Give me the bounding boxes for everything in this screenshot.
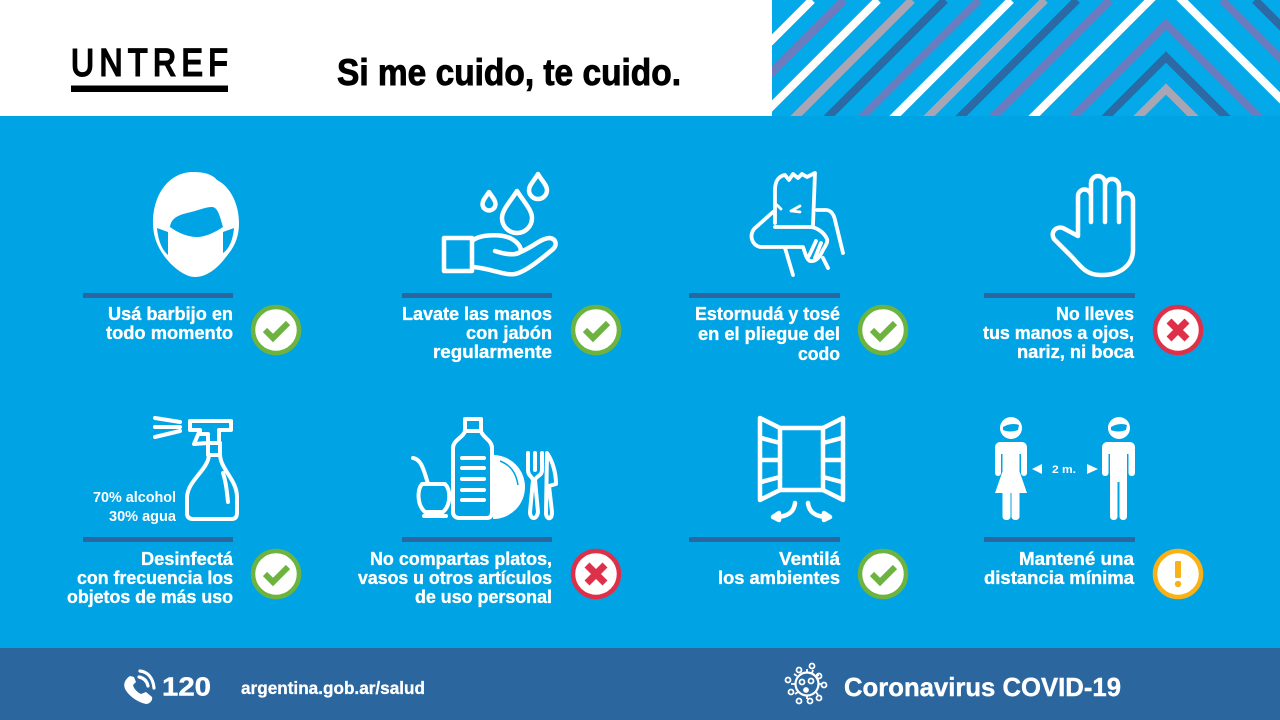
label: alcohol mix [93,489,177,525]
text: ventilar [718,549,841,588]
panel: no tocarse la cara [983,176,1201,362]
icon: man with mask [1102,417,1135,520]
icon: hand with water drops [444,174,556,274]
text: no compartir [358,549,552,607]
icon: warning badge [1155,551,1201,597]
text: desinfectar: objetos de más uso [67,587,233,607]
text: desinfectar: Desinfectá [141,549,234,569]
icon: distance arrows: 2 m. [1052,464,1076,476]
label: alcohol mix: 30% agua [109,508,177,525]
text: barbijo: Usá barbijo en [108,304,233,324]
text: distancia: distancia mínima [984,568,1135,588]
icon: distance arrows [1032,464,1098,476]
text: barbijo: todo momento [106,323,233,343]
panel: no compartir [358,419,619,607]
text: no compartir: No compartas platos, [370,549,552,569]
text: distancia [984,549,1135,588]
text: estornudo: en el pliegue del [698,324,840,344]
text: ventilar: Ventilá [779,549,841,569]
decorative stripe pattern [772,0,1280,116]
icon: person sneezing into elbow [752,173,843,275]
text: no tocarse: nariz, ni boca [1017,342,1135,362]
text: desinfectar [67,549,234,607]
icon: check badge [253,307,299,353]
icon: phone [124,671,154,704]
phone number: 120 [162,672,211,702]
icon: check badge [860,551,906,597]
text: barbijo [106,304,233,343]
icon: virus [786,664,826,704]
icon: check badge [573,307,619,353]
panel: ventilar [689,418,906,597]
text: estornudo [695,304,840,364]
icon: check badge [253,551,299,597]
footer band [0,648,1280,720]
icon: open window with air arrows [760,418,843,520]
UNTREF logo: UNTREF [71,42,233,84]
panel: estornudo [689,173,906,364]
text: distancia: Mantené una [1019,549,1135,569]
text: no compartir: vasos u otros artículos [358,568,552,588]
label: alcohol mix: 70% alcohol [93,489,176,506]
icon: cross badge [1155,307,1201,353]
icon: woman with mask [995,417,1027,520]
text: no tocarse: tus manos a ojos, [983,323,1134,343]
icon: raised hand [1053,176,1133,275]
header band [0,0,772,116]
text: lavado: regularmente [433,342,552,362]
icon: cross badge [573,551,619,597]
campaign label: Coronavirus COVID-19 [844,672,1121,702]
icon: spray bottle [155,418,237,519]
icon: mate, bottle, plate and cutlery [413,419,556,519]
text: no tocarse [983,304,1135,362]
text: lavado [402,304,552,362]
icon: face with mask [153,172,239,277]
text: estornudo: Estornudá y tosé [695,304,840,324]
text: estornudo: codo [798,344,840,364]
text: no tocarse: No lleves [1056,304,1134,324]
text: lavado: con jabón [466,323,552,343]
icon: check badge [860,307,906,353]
text: lavado: Lavate las manos [402,304,552,324]
panel: distancia [984,417,1201,597]
panel: desinfectar [67,418,299,607]
text: ventilar: los ambientes [718,568,840,588]
panel: lavado de manos [402,174,619,362]
text: no compartir: de uso personal [415,587,552,607]
text: desinfectar: con frecuencia los [77,568,233,588]
panel: barbijo [83,172,299,353]
website: argentina.gob.ar/salud [241,678,425,698]
title: Si me cuido, te cuido. [337,52,681,93]
